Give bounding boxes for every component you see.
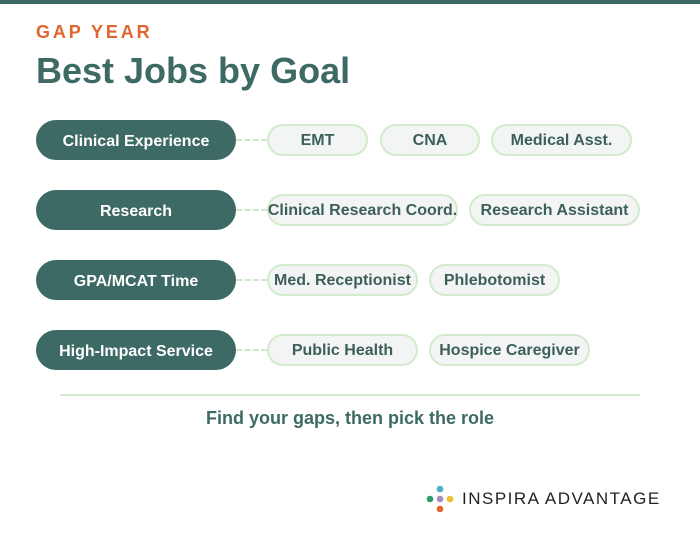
job pills: Hospice Caregiver: [439, 342, 580, 359]
label pill: High-Impact Service: [59, 342, 213, 360]
job pills: [267, 264, 560, 296]
job pills: Phlebotomist: [444, 272, 545, 289]
title: Best Jobs by Goal: [36, 50, 350, 91]
job pills: EMT: [301, 132, 334, 149]
logo: [426, 486, 661, 512]
job pills: Clinical Research Coord.: [268, 202, 457, 219]
label pill: [36, 120, 236, 160]
label pill: Clinical Experience: [63, 132, 209, 150]
icon: dots: [426, 486, 454, 512]
row: clinical experience: [36, 120, 632, 160]
kicker: GAP YEAR: [36, 22, 153, 42]
job pills: [267, 194, 640, 226]
job pills: Medical Asst.: [511, 132, 612, 149]
logo: INSPIRA ADVANTAGE: [462, 489, 661, 508]
row: research: [36, 190, 640, 230]
label pill: [36, 260, 236, 300]
row: service: [36, 330, 590, 370]
label pill: [36, 330, 236, 370]
footer tagline: Find your gaps, then pick the role: [206, 408, 494, 428]
label pill: GPA/MCAT Time: [74, 272, 198, 290]
job pills: Med. Receptionist: [274, 272, 411, 289]
job pills: Research Assistant: [481, 202, 628, 219]
top bar: [0, 0, 700, 4]
label pill: Research: [100, 202, 172, 220]
job pills: CNA: [413, 132, 447, 149]
job pills: Public Health: [292, 342, 393, 359]
job pills: [267, 334, 590, 366]
row: gpa/mcat: [36, 260, 560, 300]
label pill: [36, 190, 236, 230]
job pills: [267, 124, 632, 156]
